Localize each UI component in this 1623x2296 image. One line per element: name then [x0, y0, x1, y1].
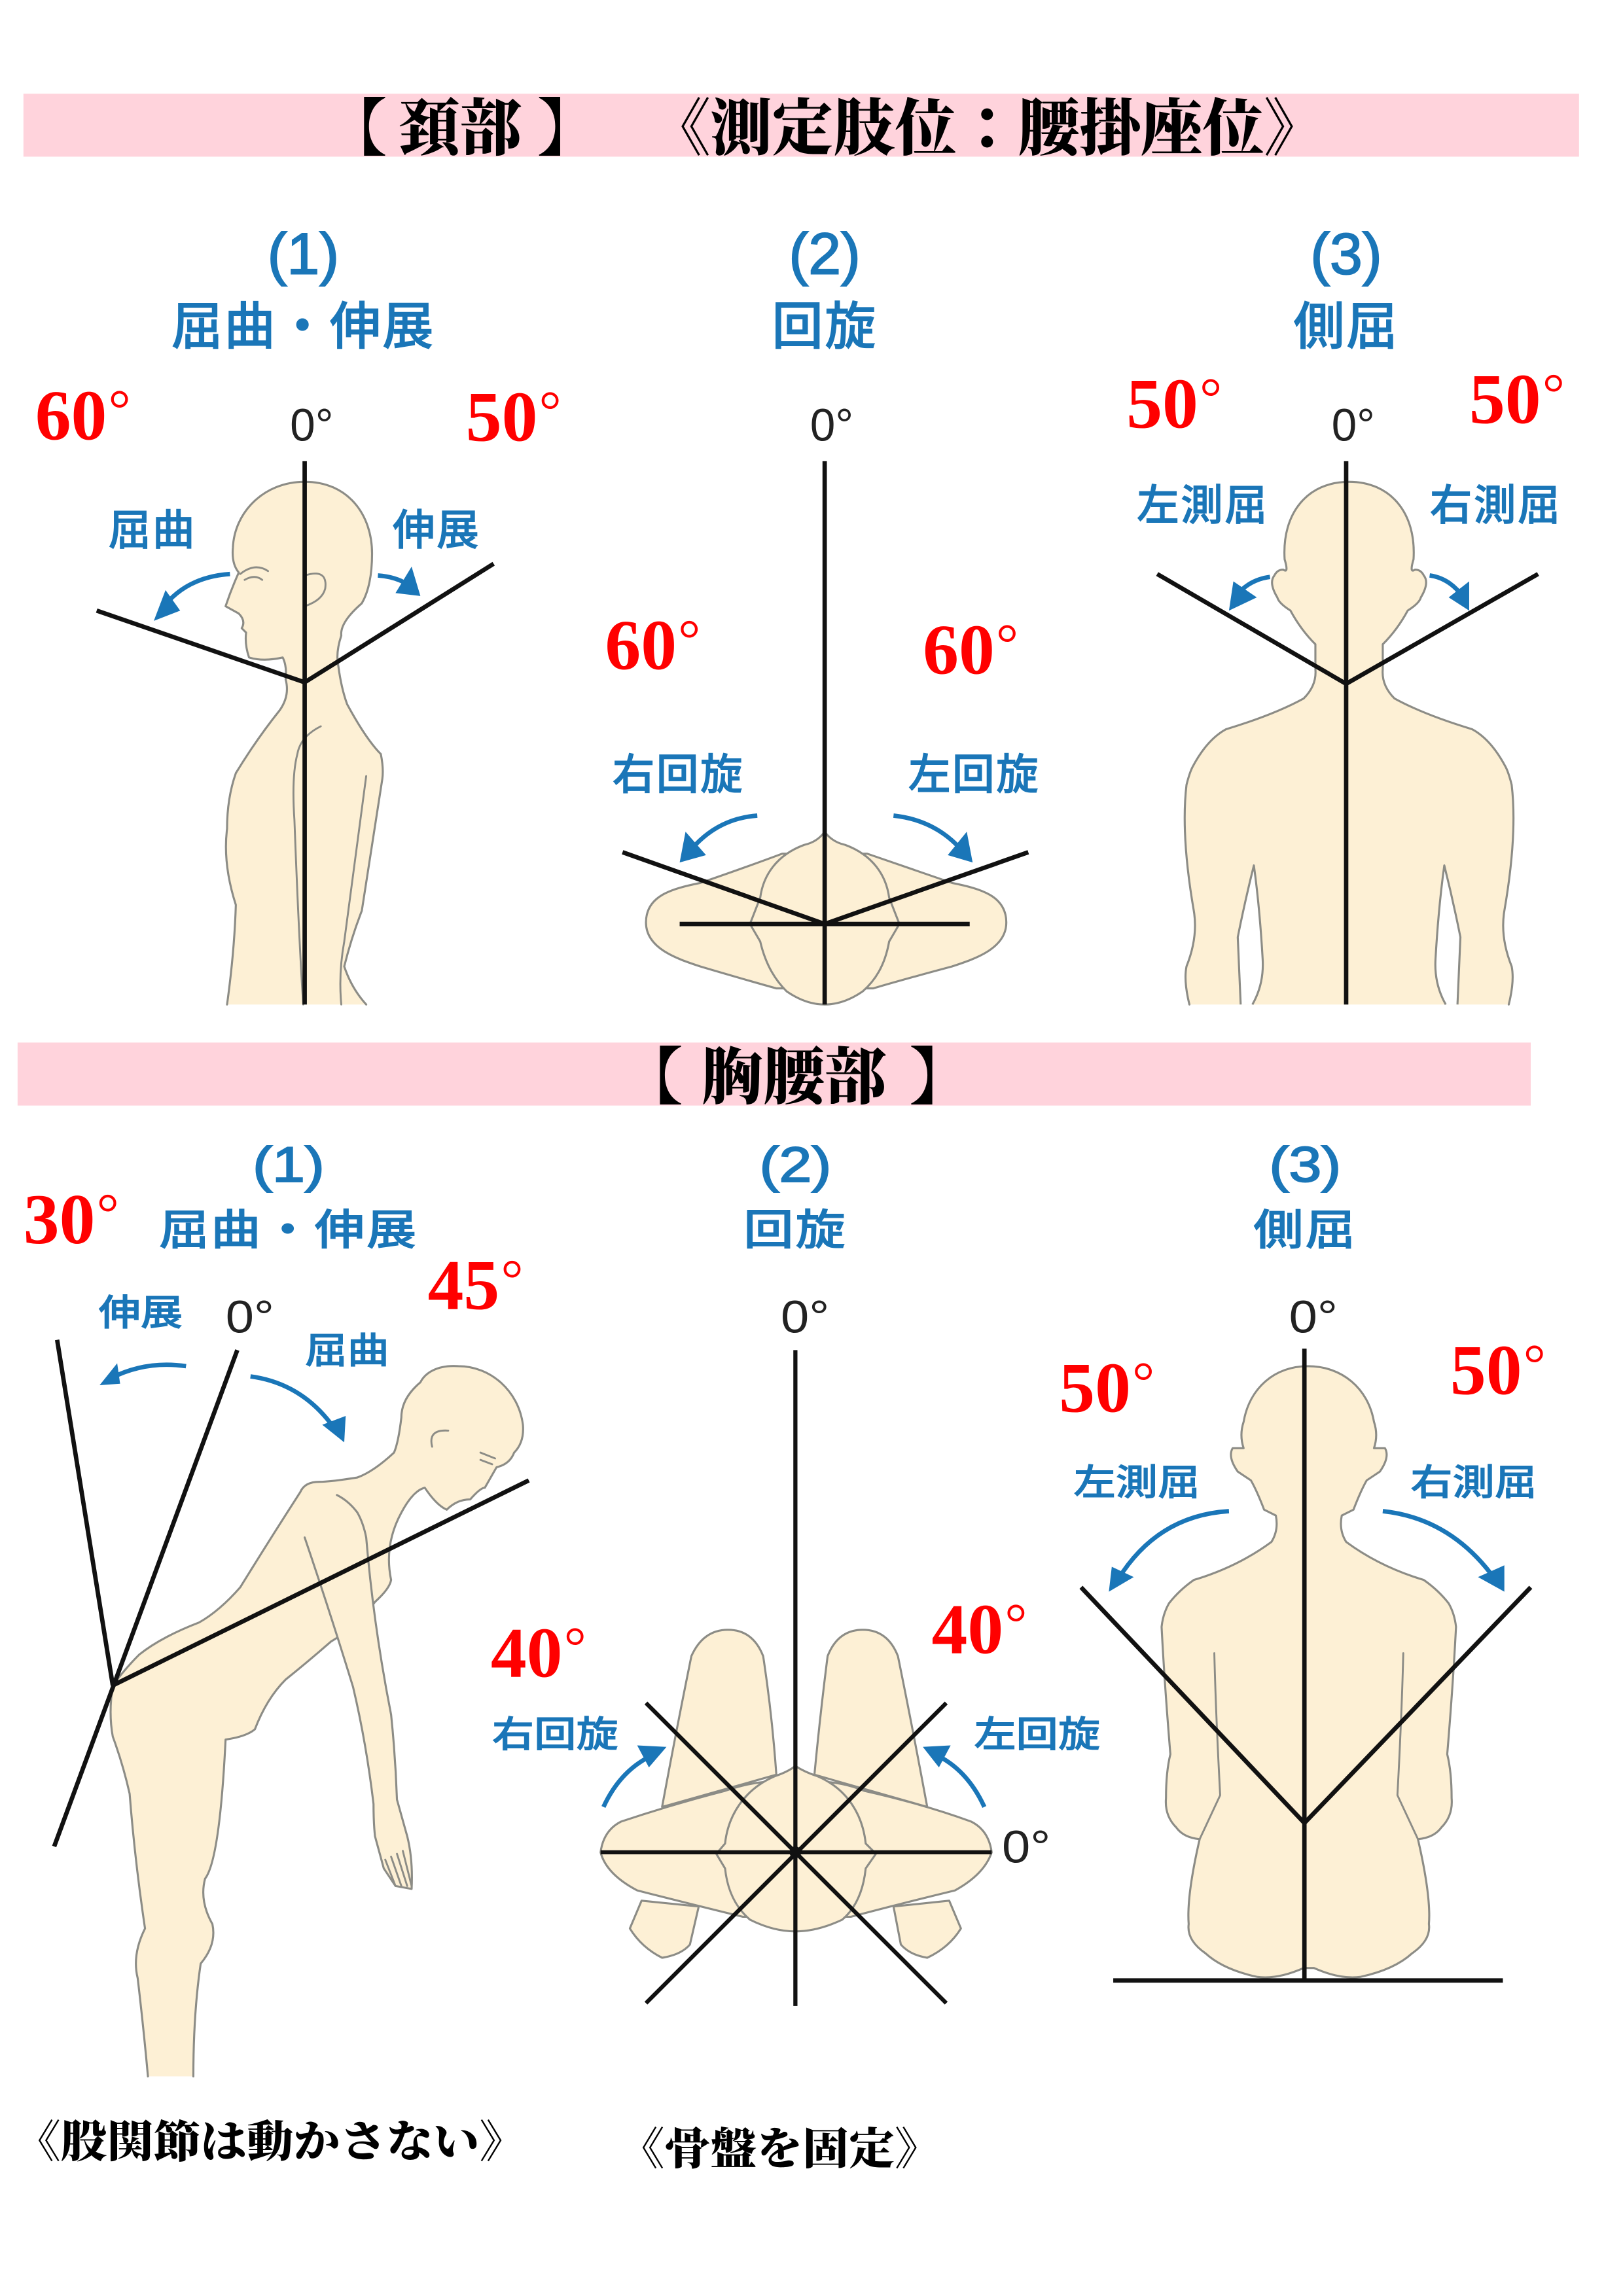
label: left rotation: 左回旋 — [974, 1714, 1100, 1755]
arrow: left rotation — [893, 816, 972, 862]
angle lines — [97, 461, 493, 1004]
angle label: 0 degrees: 0° — [810, 400, 853, 451]
angle label: 50 degrees right: 50 — [1469, 359, 1541, 439]
panel title — [743, 1137, 847, 1254]
figure: rear view of seated body — [1162, 1366, 1456, 1977]
angle label: 60 degrees flexion: 60 — [35, 375, 107, 455]
angle label: 50 degrees extension: ° — [539, 380, 562, 442]
label: extension: 伸展 — [393, 506, 480, 554]
angle label: 40 degrees right: 40 — [491, 1612, 562, 1692]
label: right rotation: 右回旋 — [613, 751, 744, 798]
panel title: 屈曲・伸展 — [171, 298, 435, 355]
caption: hip joint stays fixed: 《股関節は動かさない》 — [14, 2117, 526, 2166]
panel title: 回旋 — [743, 1207, 847, 1254]
angle lines — [622, 461, 1028, 1004]
angle lines — [1157, 461, 1538, 1004]
heading: neck section banner: 】 — [537, 95, 599, 163]
label: flexion: 屈曲 — [109, 506, 196, 554]
figure: standing forward bend — [111, 1366, 523, 2076]
panel title: (2) — [789, 221, 861, 286]
arrow: left bending — [1109, 1511, 1229, 1592]
heading: thoracolumbar section banner: 胸腰部 — [702, 1044, 886, 1112]
panel: trunk flexion and extension — [14, 1137, 529, 2166]
angle label: 60 degrees left: ° — [996, 613, 1018, 675]
heading: neck section banner — [24, 94, 1579, 163]
figure: top view of head and shoulders — [646, 832, 1007, 1004]
angle label: 50 degrees right: ° — [1543, 362, 1565, 424]
panel title — [772, 221, 878, 355]
arrow: right rotation — [680, 816, 757, 862]
arrow: right bending — [1430, 575, 1469, 610]
angle label: 0 degrees side: 0° — [1002, 1821, 1050, 1873]
heading: thoracolumbar section banner — [18, 1042, 1531, 1112]
figure: rear view of upper body — [1185, 482, 1514, 1004]
heading: thoracolumbar section banner: 【 — [621, 1044, 683, 1112]
angle label: 45 degrees flexion: 45 — [428, 1245, 499, 1325]
angle label: 40 degrees left: 40 — [932, 1589, 1003, 1669]
heading: thoracolumbar section banner: 】 — [910, 1044, 971, 1112]
angle label: 60 degrees right: 60 — [605, 605, 677, 685]
angle label: 30 degrees extension: ° — [97, 1182, 119, 1244]
panel title: (1) — [268, 221, 339, 286]
heading: neck section banner: 《測定肢位：腰掛座位》 — [649, 95, 1325, 163]
arrow: flexion — [154, 574, 230, 621]
panel title — [1293, 221, 1399, 355]
panel: neck lateral bending — [1126, 221, 1565, 1004]
label: right rotation: 右回旋 — [492, 1714, 618, 1755]
angle label: 60 degrees left: 60 — [923, 609, 995, 689]
heading: neck section banner: 【 — [325, 95, 387, 163]
panel title — [171, 221, 435, 355]
angle label: 0 degrees top: 0° — [781, 1291, 829, 1343]
panel title — [159, 1137, 418, 1254]
angle label: 50 degrees left: 50 — [1059, 1347, 1131, 1427]
arrow: right bending — [1383, 1511, 1505, 1592]
heading: neck section banner: 頚部 — [399, 95, 522, 163]
arrow: left rotation — [923, 1746, 984, 1807]
arrow: right rotation — [603, 1746, 666, 1807]
label: left rotation: 左回旋 — [908, 751, 1040, 798]
angle lines — [601, 1350, 991, 2006]
angle label: 50 degrees right: 50 — [1450, 1330, 1522, 1409]
arrow: flexion — [251, 1377, 346, 1442]
panel title: (2) — [760, 1137, 831, 1192]
angle label: 0 degrees: 0° — [290, 400, 334, 451]
arrow: extension — [378, 567, 420, 596]
figure: side view of upper body — [226, 482, 383, 1004]
panel title: (3) — [1269, 1137, 1341, 1192]
panel title: (3) — [1310, 221, 1382, 286]
angle label: 50 degrees left: ° — [1132, 1351, 1154, 1412]
angle lines — [54, 1340, 529, 1846]
figure: top view of seated body — [601, 1630, 991, 1958]
panel title: 側屈 — [1253, 1207, 1357, 1254]
angle label: 50 degrees right: ° — [1524, 1333, 1546, 1395]
panel: trunk rotation — [491, 1137, 1100, 2174]
label: right lateral bending: 右測屈 — [1410, 1462, 1537, 1503]
caption: fix the pelvis: 《骨盤を固定》 — [618, 2125, 941, 2174]
arrow: left bending — [1229, 577, 1270, 610]
label: left lateral bending: 左測屈 — [1073, 1462, 1200, 1503]
panel title: 回旋 — [772, 298, 878, 355]
panel: neck rotation — [605, 221, 1040, 1004]
angle label: 50 degrees extension: 50 — [466, 377, 537, 457]
panel: neck flexion and extension — [35, 221, 562, 1004]
panel: trunk lateral bending — [1059, 1137, 1546, 1981]
label: extension: 伸展 — [99, 1292, 183, 1333]
angle label: 30 degrees extension: 30 — [24, 1179, 95, 1259]
label: left lateral bending: 左測屈 — [1137, 481, 1268, 529]
panel title: (1) — [253, 1137, 325, 1192]
angle label: 60 degrees right: ° — [678, 609, 700, 670]
angle label: 50 degrees left: 50 — [1126, 363, 1198, 443]
panel title — [1253, 1137, 1357, 1254]
angle label: 40 degrees left: ° — [1005, 1593, 1027, 1654]
arrow: extension — [99, 1363, 186, 1385]
label: flexion: 屈曲 — [305, 1330, 389, 1371]
angle label: 45 degrees flexion: ° — [501, 1248, 523, 1310]
angle label: 50 degrees left: ° — [1200, 367, 1222, 429]
panel title: 屈曲・伸展 — [159, 1207, 418, 1254]
angle label: 60 degrees flexion: ° — [109, 378, 131, 440]
angle label: 0 degrees: 0° — [1332, 400, 1375, 451]
angle label: 0 degrees: 0° — [226, 1291, 274, 1343]
angle label: 0 degrees: 0° — [1289, 1291, 1338, 1343]
angle lines and floor — [1081, 1349, 1531, 1981]
angle label: 40 degrees right: ° — [564, 1616, 586, 1677]
panel title: 側屈 — [1293, 298, 1399, 355]
label: right lateral bending: 右測屈 — [1430, 481, 1561, 529]
